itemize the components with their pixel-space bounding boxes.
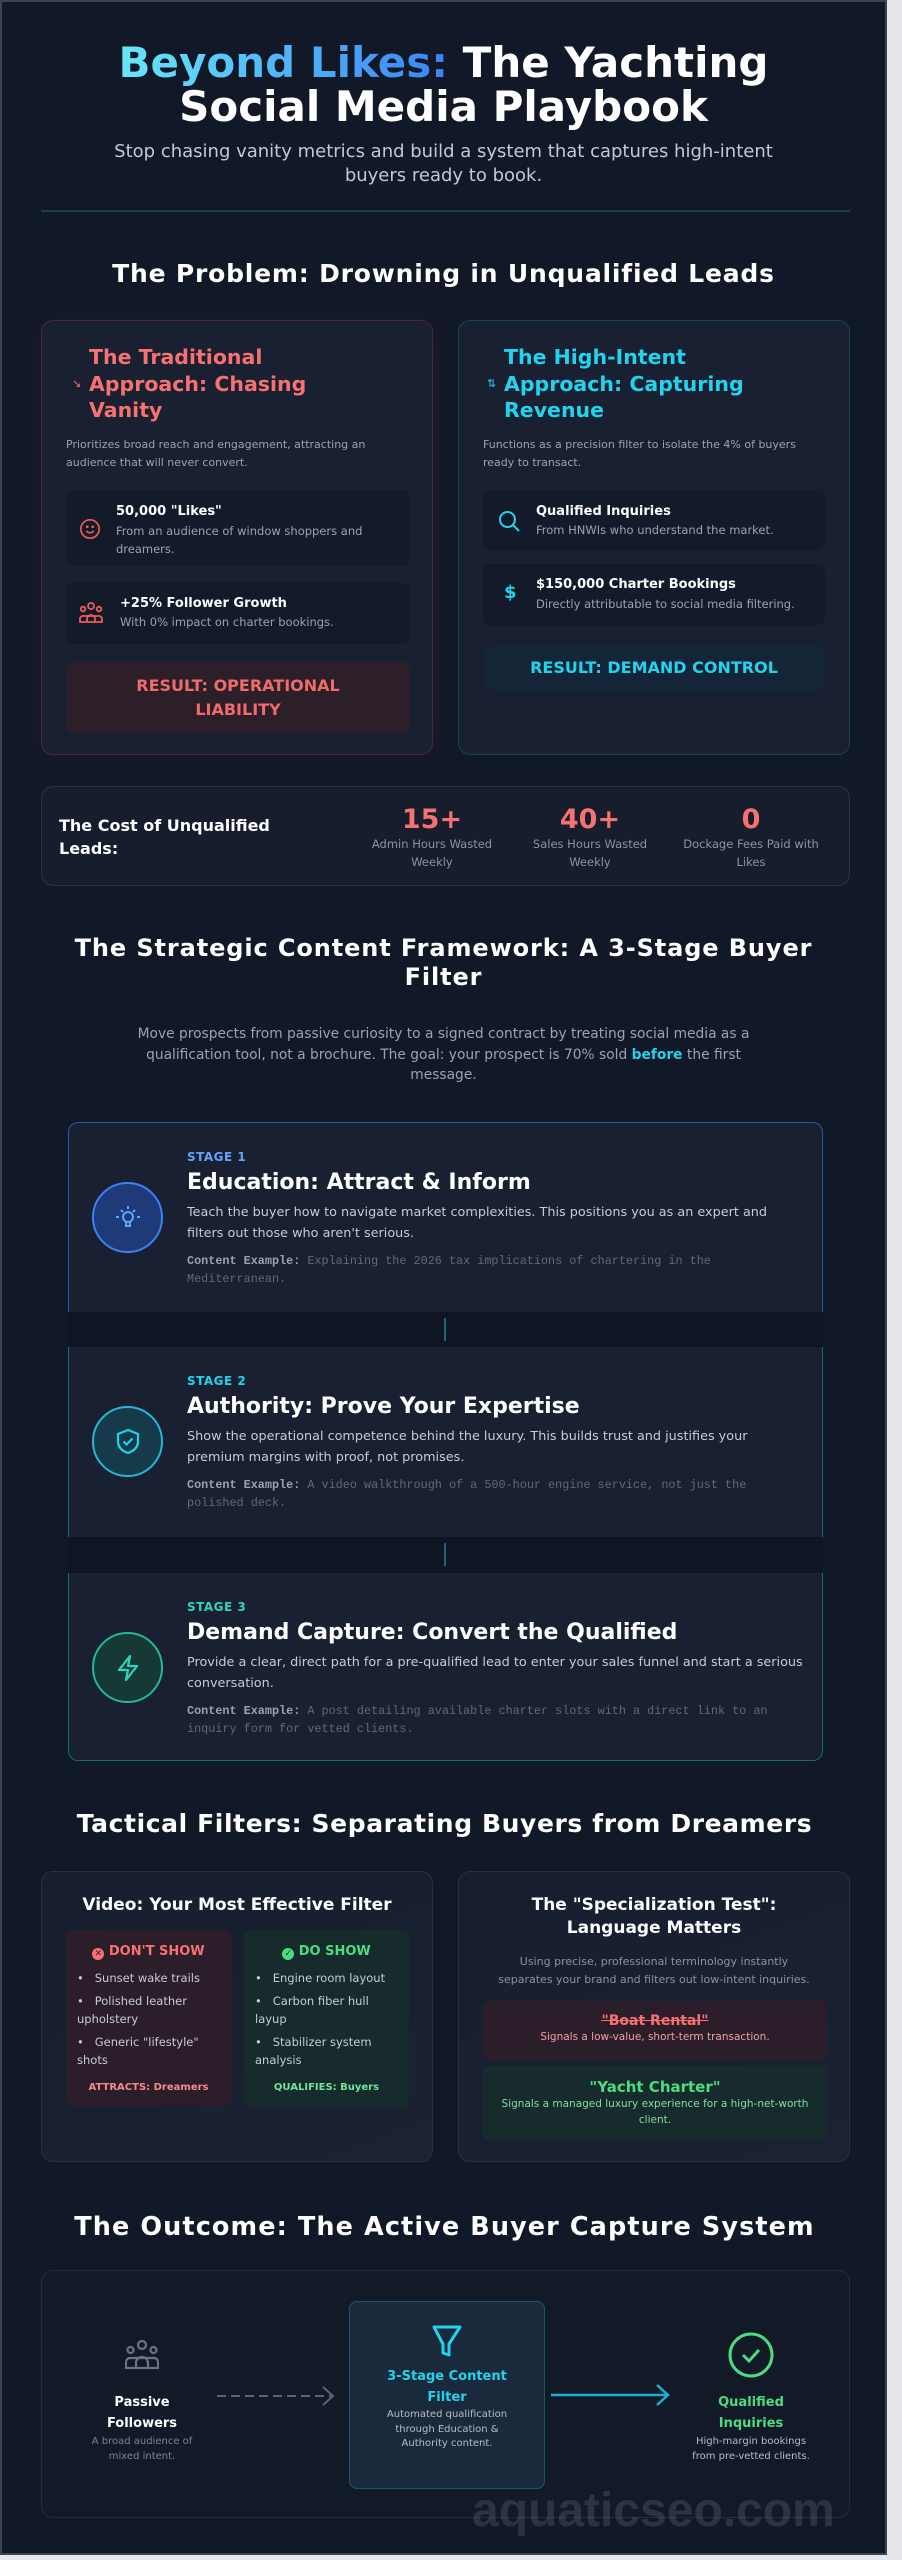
stage 3: Demand Capture: Convert the Qualified [187, 1620, 677, 1645]
don't show column: upholstery • Generic "lifestyle" [77, 2012, 199, 2049]
icon: lightning [92, 1632, 163, 1703]
intro text: qualification tool, not a brochure. The goal: your prospect is 70% sold before the first [146, 1046, 741, 1062]
connector bands [68, 1312, 823, 1347]
node: qualified inquiries: Qualified [718, 2395, 784, 2410]
card title: The Traditional [89, 345, 262, 369]
stat: sales hours: Sales Hours Wasted [533, 837, 647, 851]
stage 3: STAGE 3 [187, 1600, 246, 1614]
don't show column: shots [77, 2053, 108, 2067]
arrow: connector 1 [444, 1318, 446, 1341]
panel: specialization test [458, 1871, 850, 2162]
spec description: Using precise, professional terminology instantly [520, 1955, 788, 1968]
stat: admin hours: Admin Hours Wasted [372, 837, 492, 851]
yacht charter callout: Signals a managed luxury experience for a high-net-worth client. [502, 2098, 808, 2126]
title: Social Media Playbook [179, 82, 708, 131]
node: qualified inquiries: High-margin bookings [696, 2436, 806, 2447]
item: qualified inquiries: Qualified Inquiries [536, 504, 671, 519]
node: qualified inquiries: from pre-vetted clients. [692, 2451, 810, 2462]
stage 3: Provide a clear, direct path for a pre-qualified lead to enter your sales funnel and start a serious conversation. [187, 1655, 803, 1691]
node: 3-stage content filter: Filter [427, 2390, 467, 2405]
stage 1: STAGE 1 [187, 1150, 246, 1164]
description: ready to transact. [483, 456, 581, 469]
yacht charter callout: "Yacht Charter" [589, 2078, 721, 2096]
description: Functions as a precision filter to isolate the 4% of buyers [483, 438, 796, 451]
stat: sales hours [533, 804, 647, 869]
stat: sales hours: Weekly [569, 855, 611, 869]
do show column: QUALIFIES: Buyers [274, 2082, 379, 2093]
item: qualified inquiries [483, 490, 825, 551]
do show column: • Engine room layout • Carbon fiber hull [255, 1971, 385, 2008]
stage 2: Show the operational competence behind the luxury. This builds trust and justifies your premium margins with proof, not promises. [187, 1429, 747, 1465]
card title: Approach: Chasing [89, 372, 306, 396]
icon: dollar: $ [504, 582, 517, 603]
node: passive followers: A broad audience of [92, 2436, 192, 2447]
heading: framework [74, 934, 812, 991]
description: Prioritizes broad reach and engagement, attracting an audience that will never convert. [66, 438, 365, 469]
node: passive followers: Passive [114, 2395, 170, 2410]
item: likes [66, 490, 410, 566]
node: 3-stage content filter: 3-Stage Content [387, 2369, 507, 2384]
heading: outcome: The Outcome: The Active Buyer Capture System [74, 2212, 815, 2242]
card title: The High-Intent [504, 345, 686, 369]
stat: dockage fees: Likes [737, 855, 765, 869]
arrow: solid [551, 2384, 670, 2406]
icon: lightbulb [92, 1182, 163, 1253]
do show column [244, 1930, 409, 2106]
stage 2: Content Example: A video walkthrough of a 500-hour engine service, not just the polished deck. [187, 1478, 746, 1510]
card title [89, 345, 306, 422]
stat: dockage fees: Dockage Fees Paid with [683, 837, 819, 851]
node: 3-stage content filter: through Education & [395, 2424, 499, 2434]
spec description: separates your brand and filters out low-intent inquiries. [498, 1973, 810, 1986]
item: follower growth: With 0% impact on charter bookings. [120, 615, 334, 629]
icon: search [499, 511, 520, 532]
stat: dockage fees [683, 804, 819, 869]
don't show column: ✕ [95, 1949, 102, 1959]
card title: Vanity [89, 398, 162, 422]
don't show column: DON'T SHOW [109, 1944, 205, 1959]
cost label: Leads: [59, 839, 118, 858]
panel: high-intent approach [458, 320, 850, 755]
title [118, 38, 768, 131]
spec card title: Language Matters [567, 1918, 741, 1938]
boat rental callout: "Boat Rental" [601, 2013, 709, 2029]
heading: framework: The Strategic Content Framework: A 3-Stage Buyer [75, 934, 812, 962]
boat rental callout [483, 2001, 827, 2060]
result: demand control [483, 645, 825, 691]
heading: tactical filters: Tactical Filters: Separating Buyers from Dreamers [77, 1809, 812, 1838]
subtitle: Stop chasing vanity metrics and build a system that captures high-intent [114, 141, 773, 162]
item: likes: From an audience of window shoppers and dreamers. [116, 524, 362, 556]
icon: shield [92, 1406, 163, 1477]
boat rental callout: Signals a low-value, short-term transaction. [540, 2031, 770, 2043]
stat: sales hours: 40+ [560, 804, 620, 835]
node: passive followers [92, 2340, 192, 2462]
item: charter bookings [483, 564, 825, 625]
intro text [138, 1026, 749, 1083]
intro text: message. [410, 1067, 477, 1083]
node: 3-stage content filter: Automated qualification [387, 2409, 507, 2420]
card title: Revenue [504, 398, 604, 422]
panel: traditional approach [41, 320, 433, 755]
stat: admin hours [372, 804, 492, 869]
do show column: analysis [255, 2053, 302, 2067]
result: operational liability: RESULT: OPERATIONAL [136, 676, 340, 695]
stage 1 [68, 1122, 823, 1312]
item: qualified inquiries: From HNWIs who understand the market. [536, 523, 774, 537]
icon: scale: ⇅ [487, 377, 496, 390]
do show column: ✓ [284, 1949, 292, 1959]
stat: admin hours: Weekly [411, 855, 453, 869]
node: passive followers: Followers [107, 2416, 177, 2431]
node: qualified inquiries: Inquiries [719, 2416, 783, 2431]
spec description [498, 1955, 810, 1986]
item: charter bookings: $150,000 Charter Bookings [536, 577, 736, 592]
item: charter bookings: Directly attributable to social media filtering. [536, 597, 795, 611]
card title: Approach: Capturing [504, 372, 744, 396]
panel: cost of unqualified leads [41, 786, 850, 886]
stat: dockage fees: 0 [742, 804, 760, 835]
stage 2 [68, 1347, 823, 1537]
stage 2: STAGE 2 [187, 1374, 246, 1388]
stage 1: Content Example: Explaining the 2026 tax implications of chartering in the Mediterranean. [187, 1254, 711, 1286]
node: passive followers: mixed intent. [109, 2451, 175, 2462]
icon: trend down: ↘ [72, 377, 81, 390]
watermark: aquaticseo.com [472, 2484, 835, 2537]
node: 3-stage content filter: Authority content. [402, 2438, 492, 2449]
subtitle [114, 141, 773, 186]
heading: problem: The Problem: Drowning in Unqualified Leads [112, 259, 775, 288]
title: Beyond Likes: The Yachting [118, 38, 768, 87]
stage 1: Education: Attract & Inform [187, 1170, 531, 1195]
video card title: Video: Your Most Effective Filter [82, 1895, 392, 1915]
intro text: Move prospects from passive curiosity to a signed contract by treating social media as a [138, 1026, 749, 1042]
arrow: dashed [217, 2386, 334, 2406]
heading: framework: Filter [405, 963, 482, 991]
item: follower growth [66, 583, 410, 644]
subtitle: buyers ready to book. [345, 165, 542, 186]
result: operational liability: LIABILITY [195, 700, 281, 719]
result: operational liability [66, 662, 410, 733]
stat: admin hours: 15+ [402, 804, 462, 835]
description [483, 438, 796, 469]
spec card title [532, 1895, 776, 1938]
item: follower growth: +25% Follower Growth [120, 596, 287, 611]
stage 3 [68, 1573, 823, 1761]
icon: people [79, 602, 103, 623]
do show column: DO SHOW [299, 1944, 371, 1959]
don't show column: • Sunset wake trails • Polished leather [77, 1971, 200, 2008]
stage 1: Teach the buyer how to navigate market complexities. This positions you as an expert and filters out those who aren't serious. [187, 1205, 767, 1241]
don't show column [66, 1930, 231, 2106]
node: qualified inquiries [692, 2332, 810, 2462]
do show column: layup • Stabilizer system [255, 2012, 372, 2049]
node: 3-stage content filter [349, 2301, 545, 2489]
yacht charter callout [483, 2066, 827, 2140]
panel: buyer capture system [41, 2270, 850, 2518]
panel: video filter [41, 1871, 433, 2162]
icon: smiley [80, 519, 100, 539]
arrow: connector 2 [444, 1543, 446, 1566]
item: likes: 50,000 "Likes" [116, 504, 222, 519]
spec card title: The "Specialization Test": [532, 1895, 776, 1915]
don't show column: ATTRACTS: Dreamers [89, 2082, 208, 2093]
cost label: The Cost of Unqualified [59, 816, 270, 835]
stage 3: Content Example: A post detailing available charter slots with a direct link to an inquiry form for vetted clients. [187, 1704, 768, 1736]
card title [504, 345, 744, 422]
cost label [59, 816, 270, 858]
stage 2: Authority: Prove Your Expertise [187, 1394, 580, 1419]
result: demand control: RESULT: DEMAND CONTROL [530, 658, 778, 677]
